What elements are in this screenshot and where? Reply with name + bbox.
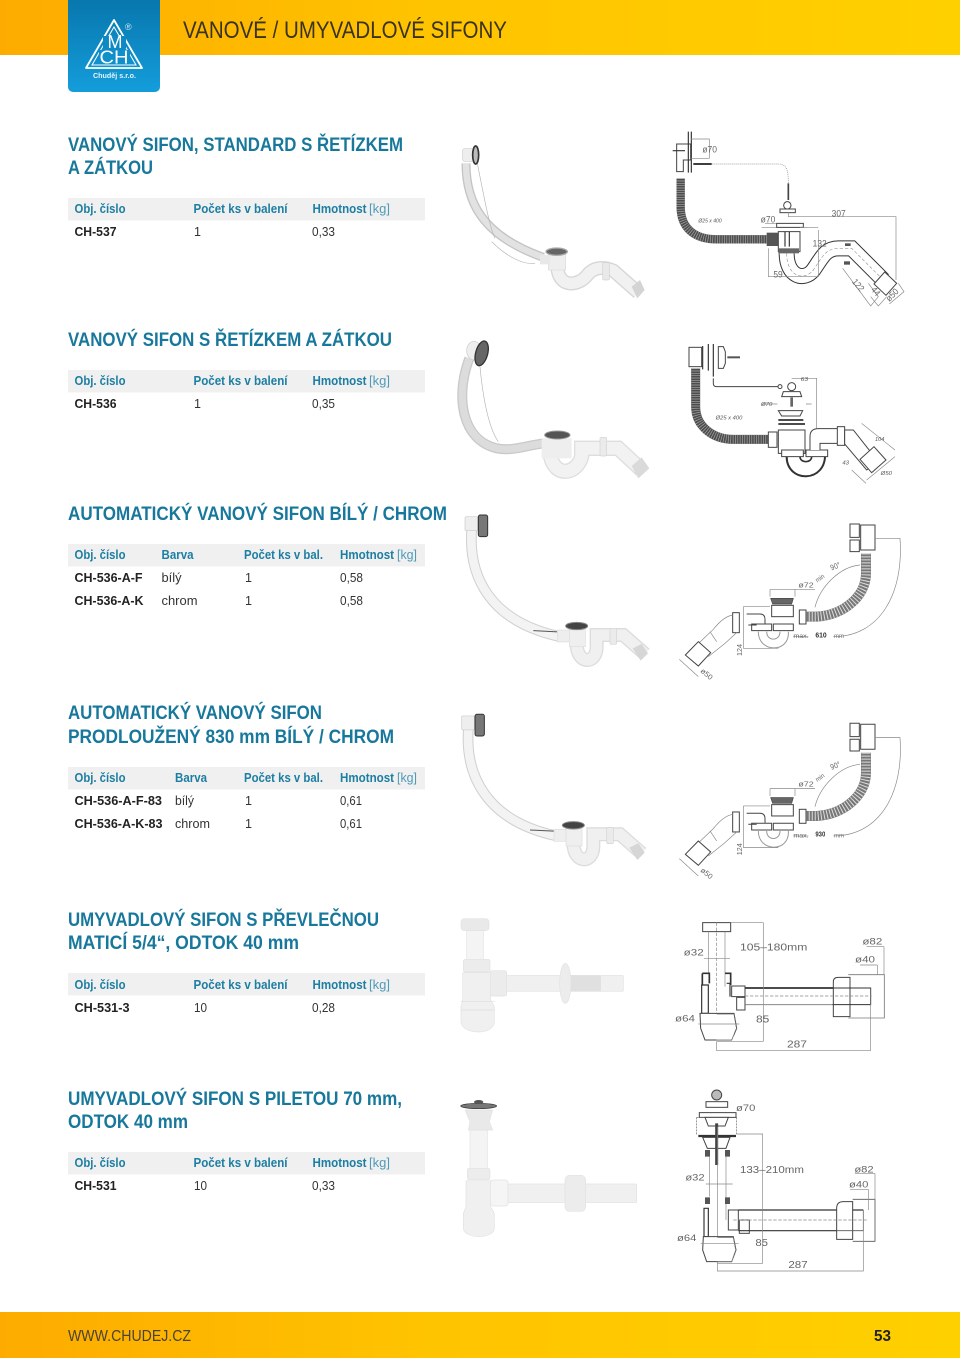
logo: MCH Chuděj s.r.o.: M: [108, 32, 122, 52]
spec table: [68, 544, 425, 608]
spec table: Hmotnost: [312, 978, 367, 992]
spec table: chrom: [162, 594, 198, 608]
technical drawing: CH-536: Ø70: [760, 402, 773, 408]
spec table: Barva: [175, 771, 208, 785]
technical drawing: CH-531-3: ø64: [675, 1013, 695, 1023]
heading: [68, 134, 403, 179]
heading: UMYVADLOVÝ SIFON S PŘEVLEČNOU: [68, 909, 379, 931]
technical drawing: CH-537: 307: [832, 209, 846, 219]
spec table: CH-531-3: [74, 1001, 130, 1015]
footer website: WWW.CHUDEJ.CZ: [68, 1328, 191, 1345]
spec table: [kg]: [369, 1156, 390, 1170]
technical drawing: CH-537: 122: [850, 277, 866, 293]
spec table: 0,35: [312, 397, 335, 411]
heading: UMYVADLOVÝ SIFON S PILETOU 70 mm,: [68, 1088, 402, 1110]
spec table: [68, 1152, 425, 1193]
spec table: 0,58: [340, 594, 363, 608]
illustration: CH-536 product photo: [462, 340, 649, 478]
logo: MCH Chuděj s.r.o.: ®: [125, 22, 132, 32]
spec table: bílý: [162, 571, 182, 585]
technical drawing: CH-536: 43: [842, 460, 850, 466]
technical drawing: CH-537: 44: [869, 285, 882, 298]
spec table: [68, 370, 425, 411]
technical drawing: CH-531: [677, 1090, 875, 1271]
spec table: Počet ks v balení: [194, 202, 288, 216]
spec table: 10: [194, 1001, 207, 1015]
spec table: [68, 767, 425, 831]
technical drawing: CH-536: 63: [801, 377, 809, 383]
technical drawing: CH-531-3: ø32: [684, 948, 704, 958]
spec table: 0,58: [340, 571, 363, 585]
spec table: 1: [245, 571, 252, 585]
technical drawing: CH-537: Ø25 x 400: [697, 218, 722, 224]
spec table: [68, 198, 425, 239]
illustration: CH-536-A-83 product photo: [462, 714, 645, 860]
spec table: chrom: [175, 817, 210, 831]
panel: CH-531: [68, 1088, 425, 1193]
spec table: Počet ks v bal.: [244, 548, 323, 562]
technical drawing: CH-536: 104: [875, 437, 884, 443]
technical drawing: CH-536-A: 610: [815, 630, 827, 639]
spec table: 1: [245, 794, 252, 808]
spec table: Obj. číslo: [74, 374, 126, 388]
spec table: Obj. číslo: [74, 771, 126, 785]
heading: [68, 702, 394, 748]
illustration: CH-531-3 product photo: [461, 919, 623, 1032]
technical drawing: CH-531: 85: [755, 1238, 769, 1249]
spec table: Počet ks v balení: [194, 1156, 288, 1170]
technical drawing: CH-536-A-83: 90°: [829, 760, 842, 772]
heading: [68, 1088, 402, 1133]
technical drawing: CH-536-A-83: 124: [735, 843, 744, 855]
technical drawing: CH-536-A: mm: [834, 633, 844, 640]
technical drawing: CH-536-A-83: ø50: [699, 866, 715, 881]
spec table: CH-531: [74, 1179, 117, 1193]
spec table: 1: [194, 397, 201, 411]
spec table: Obj. číslo: [74, 548, 126, 562]
technical drawing: CH-536-A: ø50: [699, 666, 715, 682]
illustration: CH-531 product photo: [461, 1100, 637, 1237]
spec table: 0,33: [312, 1179, 335, 1193]
spec table: [kg]: [369, 374, 390, 388]
technical drawing: CH-531-3: ø40: [855, 954, 875, 964]
technical drawing: CH-537: [673, 132, 904, 306]
spec table: Obj. číslo: [74, 202, 126, 216]
spec table: bílý: [175, 794, 195, 808]
heading: VANOVÝ SIFON, STANDARD S ŘETÍZKEM: [68, 134, 403, 156]
logo: MCH Chuděj s.r.o.: Chuděj s.r.o.: [93, 71, 136, 80]
spec table: Hmotnost: [340, 548, 395, 562]
logo: MCH Chuděj s.r.o.: [68, 0, 160, 92]
technical drawing: CH-531: ø32: [685, 1172, 705, 1182]
spec table: 10: [194, 1179, 207, 1193]
technical drawing: CH-536-A: max.: [793, 633, 809, 640]
panel: CH-536-A: [68, 503, 447, 608]
technical drawing: CH-536-A-83: mm: [834, 832, 844, 839]
spec table: 1: [194, 225, 201, 239]
spec table: CH-537: [74, 225, 117, 239]
technical drawing: CH-537: 132: [813, 239, 827, 249]
technical drawing: CH-531: ø40: [849, 1179, 868, 1189]
spec table: CH-536-A-K: [74, 594, 144, 608]
technical drawing: CH-536-A-83: max.: [793, 832, 809, 839]
technical drawing: CH-531-3: 105–180mm: [740, 942, 807, 953]
spec table: Počet ks v balení: [194, 374, 288, 388]
technical drawing: CH-531: ø64: [677, 1233, 696, 1243]
header band: [0, 0, 960, 55]
heading: PRODLOUŽENÝ 830 mm BÍLÝ / CHROM: [68, 726, 394, 748]
panel: CH-536-A-83: [68, 702, 425, 831]
heading: MATICÍ 5/4“, ODTOK 40 mm: [68, 932, 299, 954]
technical drawing: CH-536: Ø50: [880, 471, 893, 477]
spec table: 1: [245, 594, 252, 608]
spec table: Počet ks v balení: [194, 978, 288, 992]
illustration: CH-537 product photo: [463, 146, 645, 298]
spec table: 1: [245, 817, 252, 831]
technical drawing: CH-536-A-83: [679, 723, 900, 881]
panel: CH-531-3: [68, 909, 425, 1015]
technical drawing: CH-537: ø50: [884, 286, 901, 303]
technical drawing: CH-531: ø70: [736, 1103, 755, 1113]
technical drawing: CH-537: 59: [773, 270, 783, 280]
spec table: 0,33: [312, 225, 335, 239]
spec table: Obj. číslo: [74, 978, 126, 992]
spec table: [kg]: [369, 202, 390, 216]
spec table: CH-536: [74, 397, 117, 411]
spec table: [kg]: [397, 548, 417, 562]
heading: [68, 909, 379, 954]
spec table: Počet ks v bal.: [244, 771, 323, 785]
technical drawing: CH-536: Ø25 x 400: [715, 416, 743, 422]
spec table: Barva: [162, 548, 194, 562]
technical drawing: CH-531-3: 85: [756, 1015, 770, 1026]
spec table: [68, 973, 425, 1015]
panel: CH-537: [68, 134, 425, 239]
technical drawing: CH-536: [689, 344, 895, 483]
spec table: CH-536-A-K-83: [74, 817, 163, 831]
technical drawing: CH-536-A: min: [814, 573, 826, 584]
spec table: Hmotnost: [312, 374, 367, 388]
spec table: Hmotnost: [312, 202, 367, 216]
panel: CH-536: [68, 329, 425, 411]
illustration: CH-536-A product photo: [465, 515, 648, 661]
technical drawing: CH-531-3: ø82: [862, 936, 882, 946]
technical drawing: CH-531-3: [675, 923, 884, 1051]
page title: VANOVÉ / UMYVADLOVÉ SIFONY: [183, 17, 507, 44]
technical drawing: CH-536-A: ø72: [798, 580, 814, 589]
logo: MCH Chuděj s.r.o.: CH: [100, 48, 128, 68]
technical drawing: CH-536-A-83: ø72: [798, 780, 814, 789]
heading: AUTOMATICKÝ VANOVÝ SIFON: [68, 702, 322, 724]
heading: VANOVÝ SIFON S ŘETÍZKEM A ZÁTKOU: [68, 329, 392, 351]
spec table: 0,61: [340, 817, 362, 831]
technical drawing: CH-531-3: 287: [787, 1040, 808, 1051]
spec table: Hmotnost: [340, 771, 395, 785]
spec table: CH-536-A-F-83: [74, 794, 162, 808]
spec table: 0,61: [340, 794, 362, 808]
heading: ODTOK 40 mm: [68, 1112, 188, 1133]
spec table: [kg]: [369, 978, 390, 992]
spec table: Obj. číslo: [74, 1156, 126, 1170]
technical drawing: CH-536-A: 90°: [829, 560, 842, 573]
technical drawing: CH-531: 287: [788, 1260, 808, 1271]
technical drawing: CH-536-A-83: min: [814, 772, 826, 784]
technical drawing: CH-536-A: [679, 524, 900, 682]
technical drawing: CH-536-A-83: 930: [815, 830, 825, 839]
footer band: [0, 1312, 960, 1358]
technical drawing: CH-531: 133–210mm: [740, 1165, 804, 1176]
technical drawing: CH-537: ø70: [761, 215, 775, 225]
technical drawing: CH-531: ø82: [854, 1165, 874, 1175]
heading: AUTOMATICKÝ VANOVÝ SIFON BÍLÝ / CHROM: [68, 503, 447, 525]
technical drawing: CH-537: ø70: [702, 145, 717, 155]
spec table: Hmotnost: [312, 1156, 367, 1170]
page number: 53: [874, 1328, 891, 1345]
spec table: 0,28: [312, 1001, 335, 1015]
technical drawing: CH-536-A: 124: [735, 644, 744, 656]
heading: A ZÁTKOU: [68, 157, 153, 179]
spec table: [kg]: [397, 771, 417, 785]
spec table: CH-536-A-F: [74, 571, 143, 585]
